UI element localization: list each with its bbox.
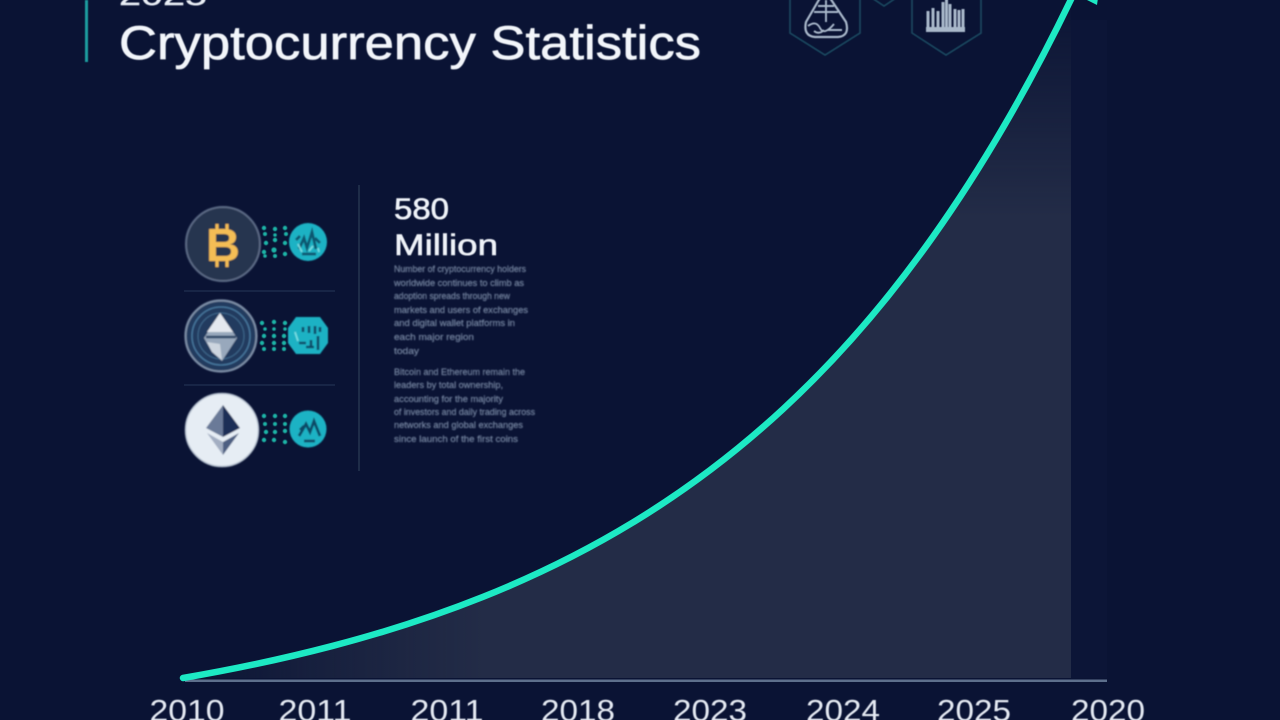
title: Cryptocurrency Statistics <box>119 16 701 69</box>
text block: description two: accounting for the majority <box>394 394 503 405</box>
icon: ethereum ring coin <box>186 300 256 372</box>
x axis <box>185 680 1107 682</box>
icon: bitcoin link dots <box>262 226 288 258</box>
text block: description two: networks and global exchanges <box>394 420 523 431</box>
icon: ethereum link dots <box>260 320 287 351</box>
icon: white coin link dots <box>262 414 287 444</box>
text block: description one: and digital wallet platforms in <box>394 318 515 329</box>
icon: ethereum white coin <box>186 394 258 466</box>
icon: flask hexagon <box>790 0 860 55</box>
icon: white coin teal badge <box>290 410 326 448</box>
text block: description one: each major region <box>394 332 474 343</box>
icon: ethereum teal badge <box>288 317 328 354</box>
hexagon icons <box>790 0 981 55</box>
icon: bar chart hexagon <box>912 0 981 55</box>
faint right band <box>1071 20 1107 678</box>
growth chart <box>183 0 1107 682</box>
growth curve <box>183 0 1073 678</box>
headline stat <box>394 193 498 262</box>
area under curve <box>266 64 1071 678</box>
text block: description one: worldwide continues to climb as <box>393 278 524 289</box>
text block: description one: markets and users of exchanges <box>394 305 528 316</box>
x axis year labels <box>150 693 1145 720</box>
text block: description one: today <box>394 346 419 357</box>
icon: bitcoin coin <box>186 207 260 281</box>
text block: description one: Number of cryptocurrency holders <box>394 264 526 275</box>
icon: small hexagon <box>872 0 896 6</box>
text block: description two <box>394 367 535 445</box>
arrow head <box>1083 0 1098 5</box>
panel: coin list <box>184 185 359 471</box>
text block: description two: of investors and daily trading across <box>394 407 535 418</box>
text block: description one <box>393 264 528 357</box>
accent bar <box>85 0 88 62</box>
headline stat: 580 <box>394 193 449 226</box>
text block: description two: since launch of the first coins <box>394 434 518 445</box>
icon: bitcoin coin: B <box>206 219 240 271</box>
headline stat: Million <box>394 229 498 262</box>
header: year and title <box>85 0 701 69</box>
text block: description two: Bitcoin and Ethereum remain the <box>394 367 525 378</box>
text block: description two: leaders by total ownership, <box>394 380 503 391</box>
icon: bitcoin teal badge <box>289 223 327 261</box>
text block: description one: adoption spreads through new <box>394 291 510 302</box>
divider lines <box>184 291 335 385</box>
